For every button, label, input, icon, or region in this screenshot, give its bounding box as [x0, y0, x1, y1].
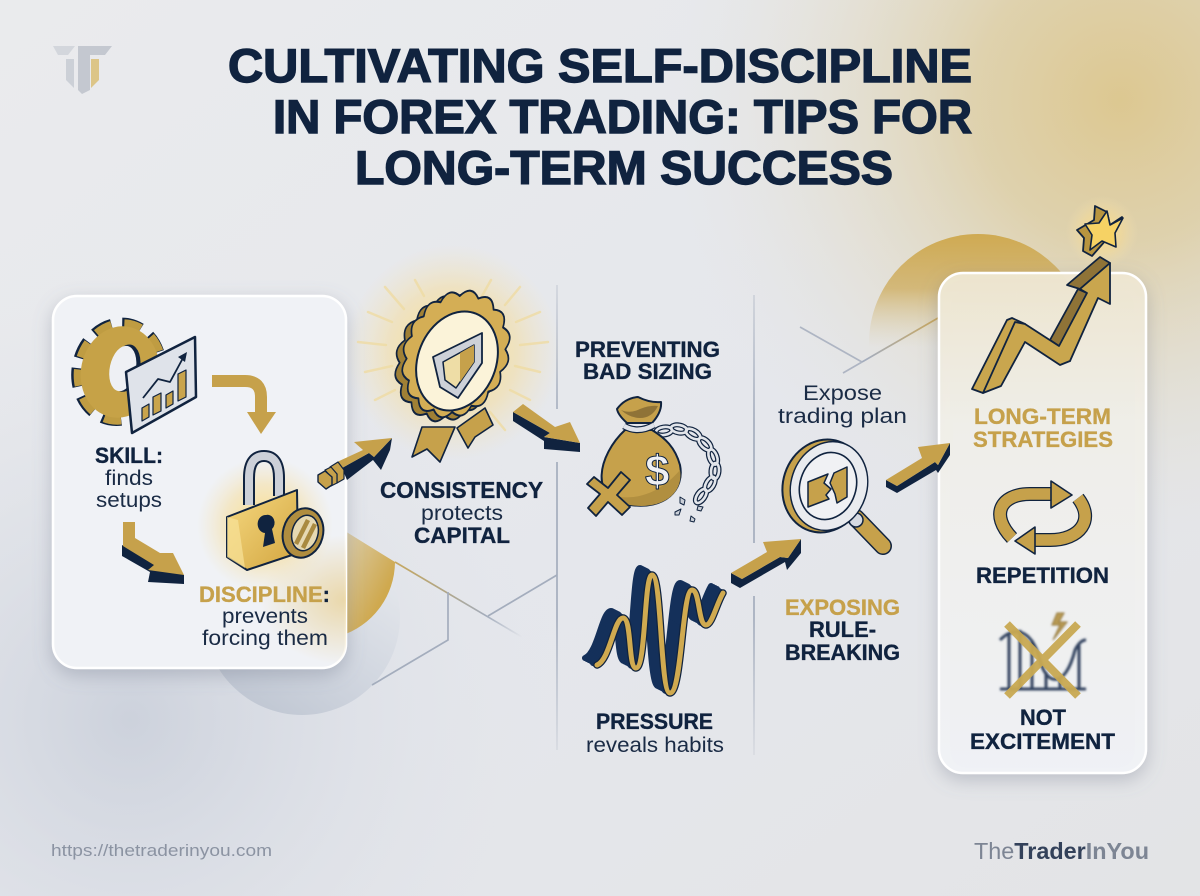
text: exposing rule-breaking: [785, 595, 900, 665]
footer brand: TheTraderInYou: [974, 838, 1149, 864]
title: [228, 39, 972, 194]
title: IN FOREX TRADING: TIPS FOR: [273, 90, 972, 143]
text: exposing rule-breaking: EXPOSING: [785, 595, 900, 620]
title: LONG-TERM SUCCESS: [355, 141, 893, 194]
text: preventing bad sizing: BAD SIZING: [583, 359, 712, 384]
text: pressure: reveals habits: [586, 734, 724, 757]
text: consistency: CAPITAL: [414, 523, 510, 548]
panel: skill and discipline: [44, 293, 354, 682]
text: repetition: REPETITION: [976, 563, 1109, 588]
text: not excitement: NOT: [1020, 705, 1067, 730]
text: discipline: forcing them: [202, 627, 328, 650]
logo: [53, 46, 112, 94]
text: pressure: PRESSURE: [596, 709, 713, 734]
arrow: consistency to bad sizing: [513, 404, 580, 452]
text: preventing bad sizing: PREVENTING: [575, 337, 720, 362]
text: exposing rule-breaking: RULE-: [809, 617, 876, 642]
text: expose trading plan: [778, 382, 907, 428]
text: long-term strategies: [973, 404, 1113, 452]
icon: seal badge with shield: [345, 244, 561, 462]
title: CULTIVATING SELF-DISCIPLINE: [228, 39, 972, 92]
text: preventing bad sizing: [575, 337, 720, 384]
icon: rising arrow: [972, 257, 1110, 393]
text: discipline: prevents: [222, 605, 308, 628]
text: consistency: CONSISTENCY: [380, 477, 543, 503]
text: discipline: DISCIPLINE:: [199, 582, 330, 607]
arrow: pressure to magnifier: [731, 539, 801, 588]
icon: magnifier: [770, 429, 883, 546]
arrow: skill to discipline: [212, 381, 276, 434]
arrow: skill down to discipline: [122, 522, 184, 584]
text: skill: SKILL:: [95, 443, 163, 468]
text: discipline: [199, 582, 330, 650]
icon: padlock: [197, 456, 333, 593]
icon: pressure wave: [585, 568, 723, 693]
text: long-term strategies: LONG-TERM: [974, 404, 1111, 429]
text: expose trading plan: Expose: [803, 382, 882, 405]
arrow: discipline to consistency: [318, 438, 392, 489]
icon: money bag with chain: $: [645, 447, 669, 496]
text: consistency: protects: [421, 502, 503, 525]
icon: gear and chart: [72, 319, 196, 433]
text: long-term strategies: STRATEGIES: [973, 427, 1113, 452]
text: skill: [95, 443, 163, 512]
icon: crossed-out roller coaster: [1000, 613, 1086, 696]
icon: star: [1066, 196, 1138, 268]
panel: long-term strategies: [939, 273, 1146, 773]
text: not excitement: [970, 705, 1116, 754]
text: skill: finds: [105, 467, 153, 490]
text: not excitement: EXCITEMENT: [970, 729, 1116, 754]
icon: repetition arrows: [1000, 481, 1085, 554]
footer url: https://thetraderinyou.com: [51, 841, 272, 860]
text: consistency: [380, 477, 543, 548]
text: exposing rule-breaking: BREAKING: [785, 640, 900, 665]
decorative circles and lines: [204, 234, 1087, 755]
text: pressure: [586, 709, 724, 757]
icon: money bag with chain: [587, 397, 720, 522]
text: skill: setups: [96, 489, 162, 512]
text: expose trading plan: trading plan: [778, 405, 907, 428]
arrow: magnifier to long-term strategies: [886, 443, 950, 493]
